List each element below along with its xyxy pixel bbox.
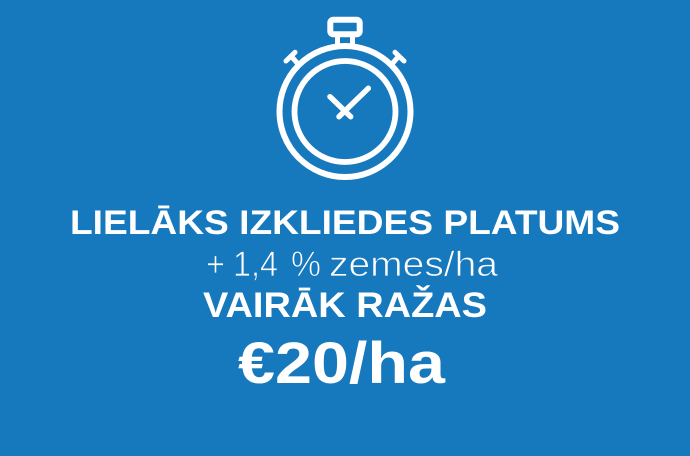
text: land per hectare	[206, 245, 499, 284]
value: euro per hectare: €20/ha	[238, 331, 446, 396]
text: land per hectare: %	[291, 245, 321, 284]
icon: stopwatch	[280, 20, 410, 177]
text: land per hectare: zemes/ha	[329, 245, 499, 284]
heading: vairāk ražas: VAIRĀK RAŽAS	[203, 285, 487, 325]
heading: lielāks izkliedes platums: LIELĀKS IZKLIEDES PLATUMS	[70, 204, 620, 242]
text: land per hectare: +	[206, 245, 225, 284]
text: land per hectare: 1,4	[233, 245, 278, 284]
